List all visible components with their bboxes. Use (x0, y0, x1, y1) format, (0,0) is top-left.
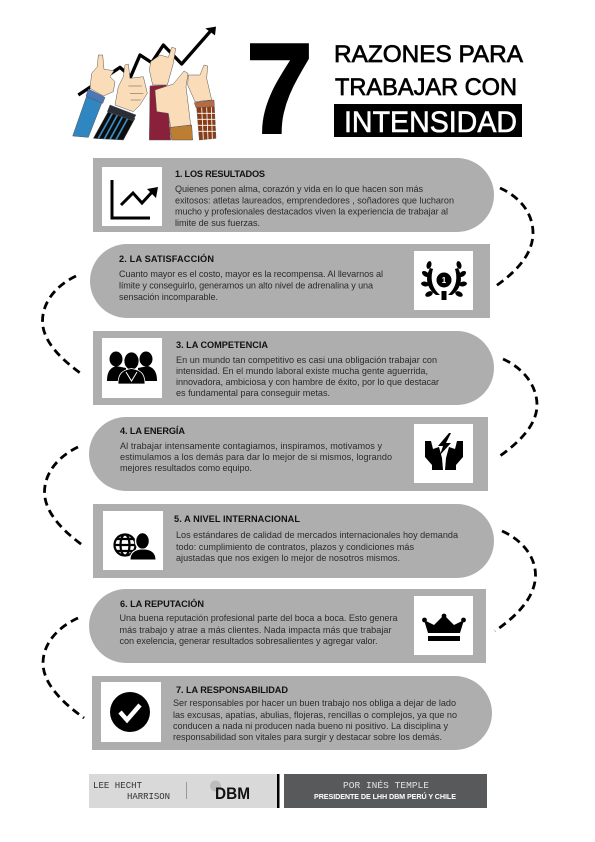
text: satisfaccion body (119, 269, 383, 302)
text: resultados body: exitosos: atletas laureados, emprendedores , soñadores que lucharon (175, 196, 454, 206)
arrow: dashed connector 2 to 3 (42, 276, 83, 375)
heading: 5 a nivel internacional: 5. A NIVEL INTERNACIONAL (174, 514, 300, 524)
text: satisfaccion body: límite y conseguirlo, generamos un alto nivel de adrenalina y una (119, 280, 374, 290)
text: energia body (120, 441, 392, 473)
title: razones para trabajar con intensidad: RAZONES PARA (334, 41, 523, 68)
icon: rising arrow (78, 27, 216, 95)
icon: checked sleeve hand (188, 65, 216, 140)
text: reputacion body: Una buena reputación profesional parte del boca a boca. Esto genera (120, 613, 398, 623)
footer: logos lee hecht harrison dbm: HARRISON (127, 792, 170, 802)
text: competencia body: intensidad. En el mundo laboral existe mucha gente aguerrida, (176, 366, 428, 376)
text: resultados body (175, 184, 454, 228)
title: razones para trabajar con intensidad: INTENSIDAD (344, 106, 517, 139)
heading: 7 la responsabilidad: 7. LA RESPONSABILIDAD (176, 685, 288, 695)
icon: line chart (112, 180, 158, 218)
icon: check mark (110, 692, 150, 732)
icon: striped sleeve hand (93, 64, 147, 140)
text: satisfaccion body: Cuanto mayor es el costo, mayor es la recompensa. Al llevarnos al (119, 269, 383, 279)
footer: logos lee hecht harrison dbm (89, 774, 280, 808)
text: resultados body: mucho y profesionales destacados viven la experiencia de trabajar al (175, 206, 448, 216)
panel: 7 la responsabilidad (92, 676, 492, 750)
text: reputacion body (120, 613, 398, 646)
text: resultados body: limite de sus fuerzas. (175, 218, 260, 228)
title: razones para trabajar con intensidad: TRABAJAR CON (335, 74, 517, 101)
text: reputacion body: más trabajo y atrae a más clientes. Nada impacta más que trabajar (120, 625, 392, 635)
footer: logos lee hecht harrison dbm: LEE HECHT (93, 781, 143, 791)
panel: 1 los resultados (93, 158, 494, 232)
text: competencia body: es fundamental para conseguir metas. (176, 388, 330, 398)
icon: laurel medal (421, 261, 467, 300)
text: responsabilidad body: responsabilidad son vitales para surgir y destacar sobre los demás. (173, 732, 442, 742)
heading: 4 la energia: 4. LA ENERGÍA (120, 425, 185, 436)
icon: hands with lightning bolt (425, 433, 463, 470)
icon: blue sleeve hand (73, 55, 115, 137)
text: competencia body: innovadora, ambiciosa y con hambre de éxito, por lo que destacar (176, 377, 439, 387)
icon: tan sleeve hand (155, 71, 193, 140)
title: big number 7: 7 (246, 18, 313, 161)
arrow: dashed connector 3 to 4 (497, 359, 537, 458)
text: responsabilidad body (173, 698, 457, 742)
text: energia body: Al trabajar intensamente contagiamos, inspiramos, motivamos y (120, 441, 382, 451)
icon: globe and person (114, 532, 156, 560)
heading: 1 los resultados: 1. LOS RESULTADOS (175, 169, 265, 179)
text: internacional body (176, 530, 459, 563)
title: razones para trabajar con intensidad (334, 41, 523, 139)
icon: three business people (107, 352, 157, 384)
icon: crown (422, 614, 466, 641)
footer: author credit (284, 774, 487, 808)
text: responsabilidad body: Ser responsables por hacer un buen trabajo nos obliga a dejar de lado (173, 698, 456, 708)
panel: 2 la satisfaccion (90, 244, 490, 318)
heading: 2 la satisfaccion: 2. LA SATISFACCIÓN (119, 253, 214, 264)
text: reputacion body: con exelencia, generar resultados sobresalientes y agregar valor. (120, 636, 378, 646)
arrow: dashed connector 4 to 5 (44, 447, 85, 547)
text: competencia body (176, 355, 439, 398)
text: internacional body: Los estándares de calidad de mercados internacionales hoy demanda (176, 530, 459, 540)
text: responsabilidad body: conducen a nada ni producen nada bueno ni positivo. La disciplina y (173, 721, 448, 731)
text: energia body: estimulamos a los demás para dar lo mejor de si mismos, logrando (120, 452, 392, 462)
illustration: thumbs up hands and rising arrow (73, 27, 216, 140)
arrow: dashed connector 5 to 6 (495, 531, 536, 631)
footer: author credit: POR INÉS TEMPLE (343, 780, 429, 791)
arrow: dashed connector 6 to 7 (43, 618, 84, 718)
text: internacional body: ajustadas que nos exigen lo mejor de nosotros mismos. (176, 553, 400, 563)
text: resultados body: Quienes ponen alma, corazón y vida en lo que hacen son más (175, 184, 423, 194)
panel: 3 la competencia (93, 331, 494, 405)
arrow: dashed connector 1 to 2 (493, 188, 533, 288)
text: energia body: mejores resultados como equipo. (120, 463, 252, 473)
text: competencia body: En un mundo tan competitivo es casi una obligación trabajar con (176, 355, 437, 365)
text: responsabilidad body: las excusas, apatías, abulias, flojeras, rencillas o complejos, ya que no (173, 710, 457, 720)
heading: 6 la reputacion: 6. LA REPUTACIÓN (120, 598, 204, 609)
icon: laurel medal: 1 (442, 276, 447, 285)
footer: logos lee hecht harrison dbm: DBM (215, 784, 250, 803)
footer: author credit: PRESIDENTE DE LHH DBM PERÚ Y CHILE (314, 792, 456, 801)
panel: 5 a nivel internacional (93, 504, 494, 578)
text: satisfaccion body: sensación incomparable. (119, 292, 218, 302)
heading: 3 la competencia: 3. LA COMPETENCIA (176, 340, 268, 350)
panel: 6 la reputacion (89, 589, 486, 663)
panel: 4 la energia (89, 417, 488, 491)
icon: burgundy sleeve hand (149, 47, 176, 140)
text: internacional body: todo: cumplimiento de contratos, plazos y condiciones más (176, 542, 414, 552)
